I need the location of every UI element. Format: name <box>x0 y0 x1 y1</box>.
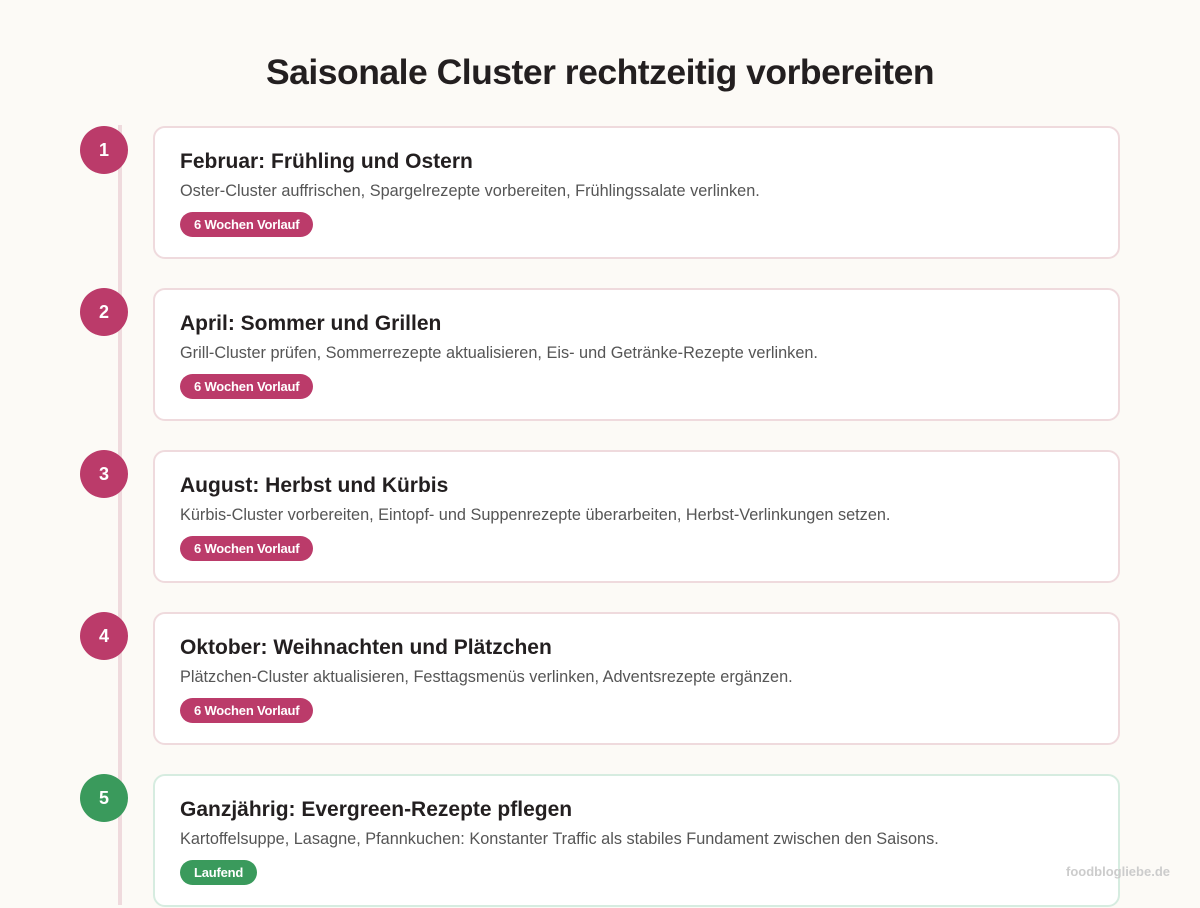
timeline line <box>118 125 122 905</box>
number 3: 3 <box>99 464 109 484</box>
card 3: 6 Wochen Vorlauf <box>194 541 299 556</box>
card 4: Plätzchen-Cluster aktualisieren, Festtagsmenüs verlinken, Adventsrezepte ergänzen. <box>180 668 793 686</box>
card 3: August: Herbst und Kürbis <box>180 474 448 497</box>
number 4: 4 <box>99 626 109 646</box>
card 5 <box>153 774 1120 907</box>
title: Saisonale Cluster rechtzeitig vorbereiten <box>266 52 934 92</box>
card 2 <box>153 288 1120 421</box>
step 2 <box>80 288 1120 421</box>
number 3 <box>80 450 128 498</box>
card 5: Laufend <box>194 865 243 880</box>
footer credit: foodblogliebe.de <box>1066 864 1170 879</box>
number 5 <box>80 774 128 822</box>
number 4 <box>80 612 128 660</box>
number 2 <box>80 288 128 336</box>
card 1: Februar: Frühling und Ostern <box>180 150 473 173</box>
card 2: Grill-Cluster prüfen, Sommerrezepte aktualisieren, Eis- und Getränke-Rezepte verlinken. <box>180 344 818 362</box>
card 3 <box>153 450 1120 583</box>
step 5 <box>80 774 1120 907</box>
card 1 <box>153 126 1120 259</box>
step 4 <box>80 612 1120 745</box>
card 5: Ganzjährig: Evergreen-Rezepte pflegen <box>180 798 572 821</box>
card 3: Kürbis-Cluster vorbereiten, Eintopf- und Suppenrezepte überarbeiten, Herbst-Verlinkungen setzen. <box>180 506 890 524</box>
step 3 <box>80 450 1120 583</box>
card 4: 6 Wochen Vorlauf <box>194 703 299 718</box>
card 1: 6 Wochen Vorlauf <box>194 217 299 232</box>
number 1 <box>80 126 128 174</box>
step 1 <box>80 126 1120 259</box>
number 2: 2 <box>99 302 109 322</box>
number 1: 1 <box>99 140 109 160</box>
card 2: April: Sommer und Grillen <box>180 312 441 335</box>
card 4: Oktober: Weihnachten und Plätzchen <box>180 636 552 659</box>
card 2: 6 Wochen Vorlauf <box>194 379 299 394</box>
number 5: 5 <box>99 788 109 808</box>
card 4 <box>153 612 1120 745</box>
card 5: Kartoffelsuppe, Lasagne, Pfannkuchen: Konstanter Traffic als stabiles Fundament zwischen den Saisons. <box>180 830 939 848</box>
card 1: Oster-Cluster auffrischen, Spargelrezepte vorbereiten, Frühlingssalate verlinken. <box>180 182 760 200</box>
